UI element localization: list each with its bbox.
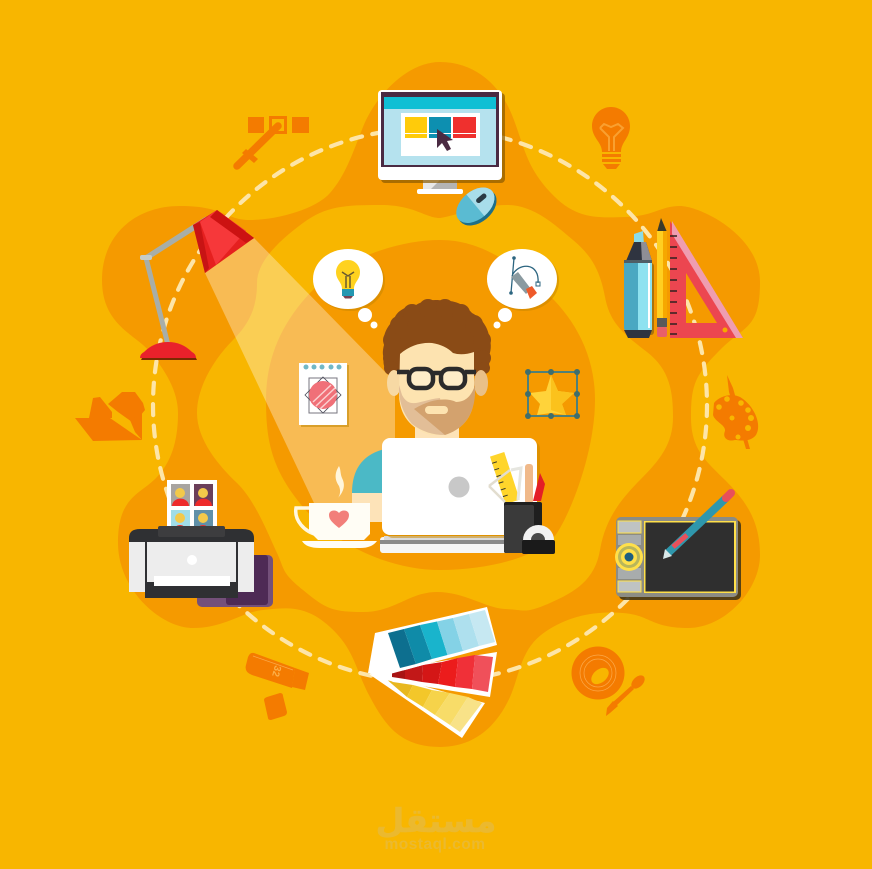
printer: [129, 480, 273, 607]
face: [399, 343, 474, 435]
stylus pen: [663, 493, 731, 559]
star transform icon: [525, 369, 580, 419]
icon: USB drive: 32: [269, 664, 283, 678]
desk lamp: [140, 210, 254, 360]
neck: [415, 425, 459, 443]
icon: folder: [75, 392, 145, 441]
icon: palette: [713, 375, 758, 449]
monitor icon: [378, 90, 505, 194]
icon: memory card: [264, 693, 287, 720]
red swatch: [369, 652, 497, 697]
ears: [387, 370, 401, 396]
designer character: [352, 299, 491, 522]
watermark: mostaql logo: mostaql.com: [384, 836, 486, 853]
coffee cup: [296, 466, 377, 548]
blue swatch: [368, 607, 497, 674]
pen holder: [489, 452, 555, 554]
thought bubble: idea: [313, 249, 385, 328]
icon: eyedropper with nodes: [237, 116, 309, 166]
lamp light beam: [205, 238, 395, 522]
yellow swatch: [369, 674, 485, 738]
notebook icon: [299, 363, 349, 427]
mouse icon: [450, 180, 503, 233]
thought bubble: pen tool: [487, 249, 559, 328]
icon: USB drive: [246, 653, 309, 690]
inner yellow flower shape: [197, 205, 673, 612]
pencil: [657, 218, 667, 337]
icon: light bulb: [592, 107, 630, 169]
marker: [624, 231, 654, 338]
drawing tablet: [615, 517, 741, 600]
outer flower shape: [102, 62, 760, 747]
hair: [383, 299, 491, 376]
triangle ruler: [670, 221, 743, 338]
beard: [399, 385, 445, 435]
shirt: [352, 449, 385, 493]
icon: tape roll and spoon: [572, 646, 647, 716]
watermark: mostaql logo: مستقل: [376, 801, 496, 840]
pens and triangle group: [624, 218, 743, 338]
laptop: [380, 438, 540, 553]
inner orange blob: [266, 240, 595, 570]
dashed circle: [153, 128, 707, 682]
colour swatches: [368, 607, 497, 738]
glasses: [397, 369, 476, 388]
